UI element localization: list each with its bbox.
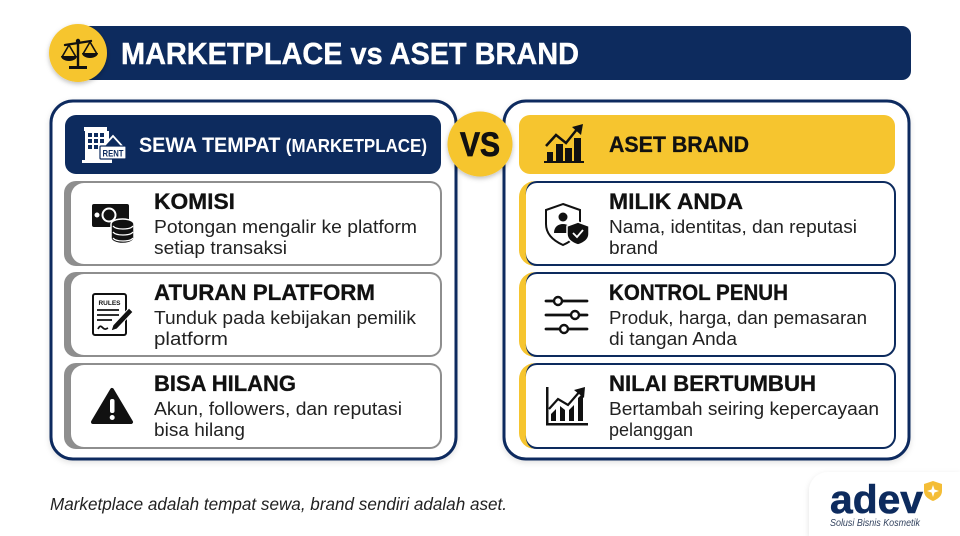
icon: rising chart (546, 387, 588, 426)
aset brand header (519, 115, 895, 174)
aturan platform text (154, 280, 417, 349)
aturan platform text: platform (154, 329, 228, 349)
bisa hilang text: Akun, followers, dan reputasi (154, 399, 402, 419)
logo shield (924, 481, 942, 501)
nilai bertumbuh text: NILAI BERTUMBUH (609, 371, 816, 396)
card: komisi (64, 181, 442, 266)
milik anda text: MILIK ANDA (609, 189, 743, 214)
kontrol penuh text (609, 280, 867, 349)
card: milik anda (519, 181, 895, 266)
vs badge: VS (460, 126, 500, 164)
logo tagline: Solusi Bisnis Kosmetik (830, 517, 921, 529)
icon: warning triangle (93, 390, 131, 422)
panel: aset brand (504, 101, 909, 459)
icon: rent building: RENT (102, 148, 124, 158)
icon: rules document: RULES (98, 300, 121, 307)
title banner (70, 26, 911, 80)
vs badge (448, 112, 512, 176)
icon: money and coins (92, 204, 134, 244)
bisa hilang text: BISA HILANG (154, 371, 296, 396)
logo: adev (809, 472, 960, 536)
kontrol penuh text: di tangan Anda (609, 329, 738, 349)
bisa hilang text: bisa hilang (154, 420, 245, 440)
marketplace header (65, 115, 441, 174)
footer note: Marketplace adalah tempat sewa, brand sendiri adalah aset. (50, 494, 507, 514)
icon: sliders (546, 297, 587, 333)
icon: shield with person (546, 204, 589, 245)
komisi text (154, 189, 417, 258)
card: bisa hilang (64, 363, 442, 449)
milik anda text (609, 189, 857, 258)
icon: growth chart (544, 124, 584, 163)
nilai bertumbuh text (609, 371, 879, 440)
nilai bertumbuh text: pelanggan (609, 420, 693, 440)
aturan platform text: Tunduk pada kebijakan pemilik (154, 308, 417, 328)
card: aturan platform (64, 272, 442, 357)
card: nilai bertumbuh (519, 363, 895, 449)
icon: rent building (82, 127, 126, 163)
kontrol penuh text: Produk, harga, dan pemasaran (609, 308, 867, 328)
bisa hilang text (154, 371, 402, 440)
milik anda text: brand (609, 238, 658, 258)
komisi text: Potongan mengalir ke platform (154, 217, 417, 237)
title: MARKETPLACE vs ASET BRAND (121, 36, 579, 71)
kontrol penuh text: KONTROL PENUH (609, 280, 788, 305)
nilai bertumbuh text: Bertambah seiring kepercayaan (609, 399, 879, 419)
aturan platform text: ATURAN PLATFORM (154, 280, 375, 305)
komisi text: setiap transaksi (154, 238, 287, 258)
logo wordmark: adev (830, 478, 924, 522)
panel: marketplace (51, 101, 456, 459)
icon: balance scale (49, 24, 107, 82)
icon: rules document (93, 294, 133, 335)
marketplace heading: SEWA TEMPAT (MARKETPLACE) (139, 134, 427, 157)
aset brand heading: ASET BRAND (609, 132, 749, 157)
card: kontrol penuh (519, 272, 895, 357)
milik anda text: Nama, identitas, dan reputasi (609, 217, 857, 237)
komisi text: KOMISI (154, 189, 235, 214)
